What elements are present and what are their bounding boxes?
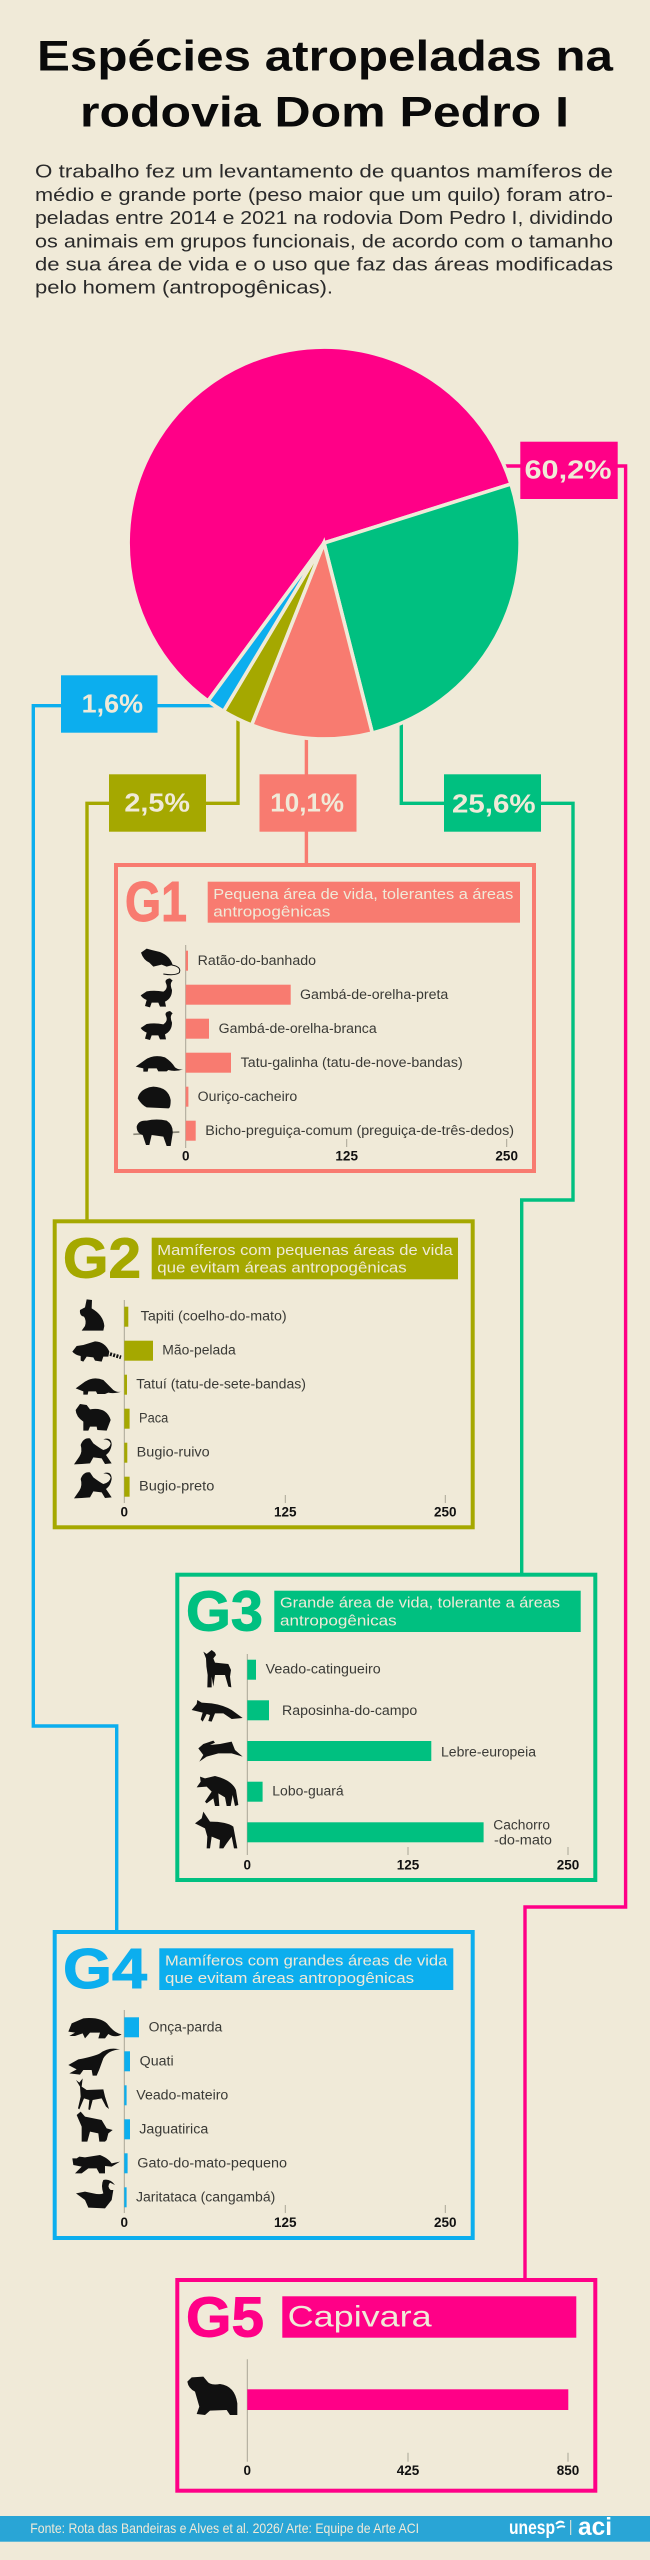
logo: aci: aci [578,2513,612,2541]
intro text block [35,161,613,297]
heading: G3: G3 [186,1580,263,1644]
G4 description [159,1948,453,1990]
G4 bar chart: 125 [274,2215,297,2230]
G3 bar chart: Lebre-europeia [441,1744,536,1759]
label: 2,5%: 2,5% [124,788,190,818]
G2 bar chart: 250 [434,1505,457,1520]
label: 2,5% [109,774,206,832]
G4 description: Mamíferos com grandes áreas de vida [165,1953,448,1970]
G1 bar chart: Tatu-galinha (tatu-de-nove-bandas) [241,1055,463,1070]
G4 bar chart: 0 [121,2215,128,2230]
panel: G3 [177,1575,595,1880]
title: rodovia Dom Pedro I [80,89,569,137]
G2 bar chart: Tapiti (coelho-do-mato) [141,1309,287,1324]
label: 60,2% [520,442,618,499]
intro text block: pelo homem (antropogênicas). [35,276,333,297]
G2 description: Mamíferos com pequenas áreas de vida [157,1242,453,1259]
G4 description: que evitam áreas antropogênicas [165,1970,414,1987]
G4 bar chart: Onça-parda [149,2020,223,2035]
panel: G2 [55,1221,473,1527]
label: 1,6%: 1,6% [82,689,143,719]
label: 25,6% [444,774,541,832]
G4 bar chart: Jaguatirica [139,2122,209,2137]
source credit: Fonte: Rota das Bandeiras e Alves et al. 2026/ Arte: Equipe de Arte ACI [30,2520,419,2536]
G3 bar chart: Lobo-guará [272,1784,344,1799]
G3 bar chart: -do-mato [494,1833,552,1848]
G1 bar chart: Gambá-de-orelha-preta [300,987,449,1002]
label: 25,6%: 25,6% [452,788,536,818]
G3 description: Grande área de vida, tolerante a áreas [280,1595,560,1612]
G5 bar chart: 0 [244,2463,251,2478]
intro text block: de sua área de vida e o uso que faz das áreas modificadas [35,253,613,274]
panel: G1 [116,865,534,1171]
G3 bar chart: Veado-catingueiro [266,1662,381,1677]
G2 bar chart: 125 [274,1505,297,1520]
G3 description [274,1591,581,1632]
G3 bar chart: 0 [244,1858,251,1873]
title [37,33,614,137]
footer [0,2513,650,2542]
heading: G2: G2 [63,1226,141,1290]
intro text block: os animais em grupos funcionais, de acordo com o tamanho [35,230,613,251]
G2 description: que evitam áreas antropogênicas [157,1259,407,1276]
G2 bar chart: Tatuí (tatu-de-sete-bandas) [136,1377,306,1392]
G3 animal icons [192,1650,243,1848]
G2 bar chart: Mão-pelada [162,1343,236,1358]
G2 animal icons [72,1299,122,1498]
G2 bar chart: Bugio-ruivo [137,1445,210,1460]
label: 60,2%: 60,2% [524,454,612,484]
G1 bar chart: Ouriço-cacheiro [198,1089,297,1104]
G4 bar chart: Quati [140,2054,174,2069]
G2 bar chart: Bugio-preto [139,1479,214,1494]
G1 bar chart: Bicho-preguiça-comum (preguiça-de-três-dedos) [205,1123,514,1138]
G3 bar chart: 250 [557,1858,579,1873]
G1 description [208,882,520,923]
G1 bar chart: Gambá-de-orelha-branca [219,1021,377,1036]
intro text block: peladas entre 2014 e 2021 na rodovia Dom Pedro I, dividindo [35,207,613,228]
intro text block: médio e grande porte (peso maior que um quilo) foram atro- [35,184,613,205]
G1 description: Pequena área de vida, tolerantes a áreas [213,886,513,903]
G1 bar chart: 0 [182,1149,189,1164]
G1 bar chart [182,945,518,1164]
G3 bar chart: 125 [397,1858,420,1873]
pie chart [128,347,520,739]
heading: G4: G4 [63,1937,147,2001]
G5 description: Capivara [288,2301,432,2334]
panel: G4 [55,1932,473,2238]
G2 bar chart: Paca [139,1411,169,1426]
logo: unesp: unesp [509,2518,555,2539]
G1 bar chart: Ratão-do-banhado [198,953,316,968]
label: 10,1% [260,774,356,832]
G5 bar chart: 850 [557,2463,579,2478]
G1 animal icons [133,949,183,1146]
label: 1,6% [61,675,158,733]
G4 bar chart: 250 [434,2215,457,2230]
heading: G5: G5 [186,2286,264,2350]
heading: G1: G1 [125,870,187,934]
G5 description [282,2296,576,2338]
title: Espécies atropeladas na [37,33,614,81]
G3 bar chart [244,1654,579,1873]
G3 bar chart: Raposinha-do-campo [282,1703,417,1718]
intro text block: O trabalho fez um levantamento de quantos mamíferos de [35,161,613,182]
panel: G5 [177,2280,595,2491]
G1 description: antropogênicas [213,904,330,921]
G4 bar chart: Veado-mateiro [136,2088,228,2103]
G3 description: antropogênicas [280,1612,397,1629]
G3 bar chart: Cachorro [493,1818,550,1833]
G1 bar chart: 125 [335,1149,358,1164]
G1 bar chart: 250 [495,1149,518,1164]
G2 bar chart: 0 [121,1505,128,1520]
G4 bar chart: Jaritataca (cangambá) [136,2190,275,2205]
G4 animal icons [68,2018,122,2208]
icon: capybara [187,2377,237,2415]
G2 bar chart [121,1300,457,1520]
connector lines [33,466,626,2280]
G4 bar chart: Gato-do-mato-pequeno [137,2156,287,2171]
label: 10,1%: 10,1% [270,788,344,818]
G5 bar chart [244,2359,579,2478]
G2 description [152,1238,458,1279]
G4 bar chart [121,2010,457,2230]
G5 bar chart: 425 [397,2463,420,2478]
